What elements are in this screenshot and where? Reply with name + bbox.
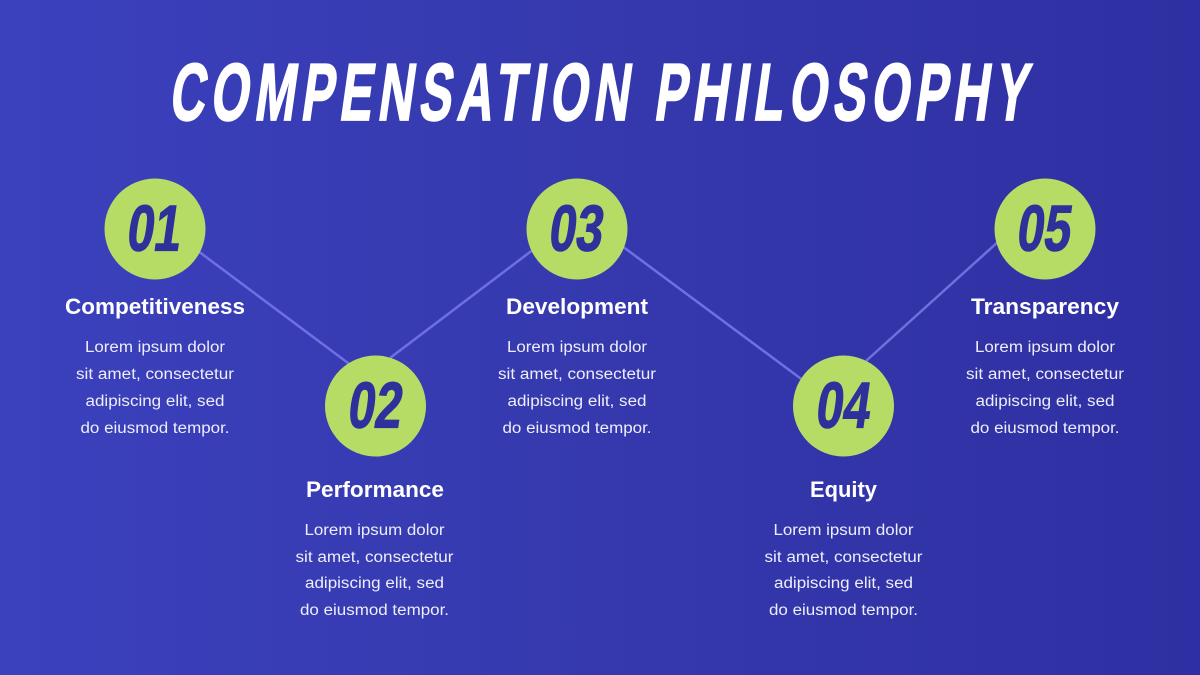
number badge 02: 02 xyxy=(344,370,408,442)
description 01 xyxy=(76,339,234,437)
number badge 01 xyxy=(104,178,206,280)
description 01: adipiscing elit, sed xyxy=(86,393,224,410)
description 03: Lorem ipsum dolor xyxy=(507,339,647,356)
description 04 xyxy=(764,522,922,619)
description 03 xyxy=(498,339,656,437)
number badge 04: 04 xyxy=(812,370,876,442)
description 05: adipiscing elit, sed xyxy=(976,393,1114,410)
step 02 xyxy=(296,356,454,619)
description 02: adipiscing elit, sed xyxy=(305,575,444,592)
description 01: do eiusmod tempor. xyxy=(80,420,230,437)
description 02 xyxy=(296,522,454,619)
connector lines xyxy=(198,241,999,381)
description 03: sit amet, consectetur xyxy=(498,366,656,383)
number badge 05: 05 xyxy=(1013,193,1077,265)
step 04 xyxy=(764,356,922,619)
heading: Development: Development xyxy=(506,294,649,319)
number badge 03: 03 xyxy=(545,193,609,265)
heading: Transparency: Transparency xyxy=(971,294,1120,319)
number badge 02 xyxy=(325,356,426,456)
number badge 01: 01 xyxy=(123,193,187,265)
number badge 05 xyxy=(994,178,1096,280)
number badge 03 xyxy=(526,178,628,280)
number badge 04 xyxy=(793,356,894,456)
description 05: Lorem ipsum dolor xyxy=(975,339,1115,356)
description 01: Lorem ipsum dolor xyxy=(85,339,225,356)
description 02: do eiusmod tempor. xyxy=(300,602,449,619)
description 03: do eiusmod tempor. xyxy=(502,420,652,437)
description 02: sit amet, consectetur xyxy=(296,549,454,566)
description 04: do eiusmod tempor. xyxy=(769,602,918,619)
description 01: sit amet, consectetur xyxy=(76,366,234,383)
description 04: Lorem ipsum dolor xyxy=(774,522,914,539)
step 03 xyxy=(498,178,656,437)
description 04: adipiscing elit, sed xyxy=(774,575,913,592)
description 05: sit amet, consectetur xyxy=(966,366,1124,383)
step 01 xyxy=(65,178,245,437)
step 05 xyxy=(966,178,1124,437)
description 05: do eiusmod tempor. xyxy=(970,420,1120,437)
description 03: adipiscing elit, sed xyxy=(508,393,646,410)
description 02: Lorem ipsum dolor xyxy=(304,522,444,539)
description 05 xyxy=(966,339,1124,437)
heading: Equity: Equity xyxy=(810,477,878,502)
heading: Competitiveness: Competitiveness xyxy=(65,294,245,319)
description 04: sit amet, consectetur xyxy=(764,549,922,566)
title: COMPENSATION PHILOSOPHY xyxy=(166,48,1042,138)
heading: Performance: Performance xyxy=(306,477,444,502)
